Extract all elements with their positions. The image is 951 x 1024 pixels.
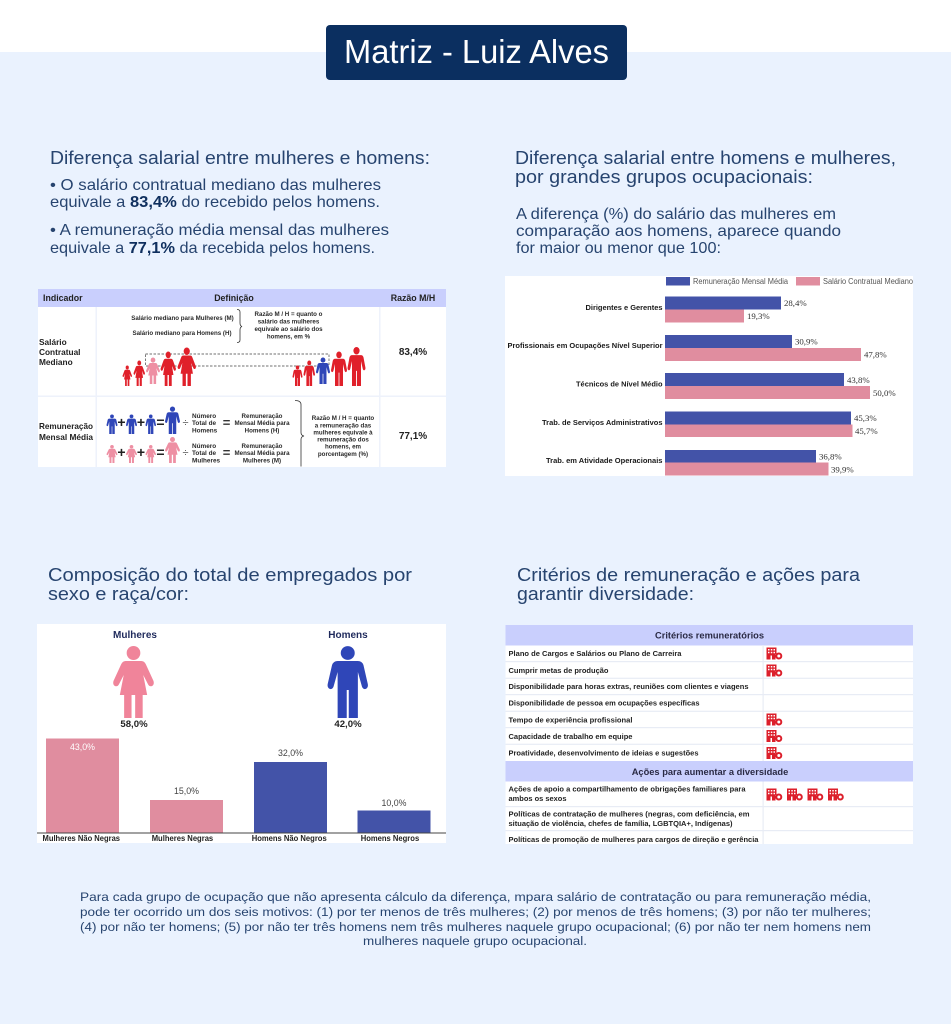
criteria rows: Cumprir metas de produção	[508, 666, 609, 675]
row label: salário contratual mediano: Salário	[39, 337, 67, 347]
heading and text: occupational groups: por grandes grupos ocupacionais:	[515, 166, 813, 187]
group: Técnicos: Técnicos de Nível Médio	[576, 380, 663, 388]
criteria rows	[508, 649, 748, 758]
average pay definition: mulheres equivale à	[313, 430, 373, 436]
footnote: pode ter ocorrido um dos seis motivos: (1) por ter menos de três mulheres; (2) por menos de três homens; (3) por não ter mulheres;	[80, 905, 871, 919]
bar: Mulheres Negras	[150, 786, 223, 843]
heading and text: occupational groups: A diferença (%) do salário das mulheres em	[516, 206, 836, 223]
bar: Mulheres Não Negras	[42, 738, 121, 843]
header: diversity actions	[506, 761, 913, 782]
heading: criteria	[517, 564, 861, 604]
panel: occupational bar chart	[505, 276, 914, 476]
bar: Homens Negros: 10,0%	[382, 798, 407, 808]
group: Técnicos: 43,8%	[847, 375, 870, 385]
group: Profissionais	[508, 335, 887, 361]
criteria rows: Tempo de experiência profissional	[508, 716, 632, 724]
group: Dirigentes e Gerentes: 19,3%	[747, 311, 770, 321]
average pay definition: Razão M / H = quanto	[312, 415, 374, 422]
women average formula: =	[156, 444, 165, 460]
men average formula: Homens	[192, 428, 218, 434]
women average formula: +	[117, 444, 126, 460]
women summary: Mulheres	[113, 630, 157, 641]
men summary: Homens	[328, 630, 368, 641]
bar: Mulheres Negras: 15,0%	[174, 786, 199, 796]
men average formula: Homens (H)	[245, 428, 279, 434]
average pay definition	[295, 400, 374, 466]
men average formula: Número	[192, 413, 216, 420]
group: Atividade Operacionais: Trab. em Atividade Operacionais	[546, 456, 662, 465]
heading: composition: sexo e raça/cor:	[48, 583, 189, 604]
group: Serviços Administrativos: Trab. de Serviços Administrativos	[542, 418, 662, 427]
heading: composition	[48, 564, 412, 604]
footnote: (4) por não ter homens; (5) por não ter três homens nem três mulheres naquele grupo ocupacional; (6) por não ter nem homens nem	[80, 920, 871, 934]
group: Atividade Operacionais	[546, 450, 854, 476]
chart legend	[666, 277, 914, 286]
women average formula: ÷	[182, 447, 189, 459]
diversity rows: Políticas de promoção de mulheres para cargos de direção e gerência	[508, 835, 759, 844]
group: Profissionais: 30,9%	[795, 336, 818, 346]
men average formula	[107, 407, 290, 434]
diversity rows: Ações de apoio a compartilhamento de obrigações familiares para	[508, 784, 746, 794]
women average formula: Mulheres (M)	[243, 458, 281, 464]
bar: Homens Negros	[358, 798, 430, 843]
bar: Homens Não Negros	[252, 748, 327, 843]
group: Dirigentes e Gerentes: 28,4%	[784, 298, 807, 308]
criteria rows: Plano de Cargos e Salários ou Plano de Carreira	[508, 649, 682, 658]
heading: criteria: garantir diversidade:	[517, 583, 694, 604]
women average formula: +	[137, 444, 145, 460]
row label: salário contratual mediano: Contratual	[39, 347, 80, 357]
group: Técnicos: 50,0%	[873, 388, 896, 398]
men average formula: ÷	[182, 417, 189, 429]
women average formula: Mulheres	[192, 458, 221, 464]
women average formula: Mensal Média para	[234, 450, 290, 457]
heading and text: occupational groups: comparação aos homens, aparece quando	[516, 223, 841, 240]
row label: remuneração mensal média	[39, 421, 93, 442]
median salary definition: homens, em %	[267, 334, 311, 340]
footnote: Para cada grupo de ocupação que não apresenta cálculo da diferença, mpara salário de contratação ou para remuneração média,	[80, 890, 871, 904]
heading and text: salary difference	[50, 147, 430, 257]
panel: indicator table	[38, 289, 446, 467]
header: criteria	[506, 625, 913, 646]
bar: Mulheres Negras: Mulheres Negras	[152, 834, 214, 843]
value 83,4%: 83,4%	[399, 347, 427, 358]
median salary definition: equivale ao salário dos	[254, 326, 323, 333]
row label: salário contratual mediano: Mediano	[39, 357, 73, 367]
bar: Homens Negros: Homens Negros	[361, 834, 420, 843]
header: criteria: Critérios remuneratórios	[655, 630, 764, 640]
icons: companies adopting actions	[766, 788, 844, 800]
men average formula: =	[156, 414, 165, 430]
women average formula: =	[223, 445, 231, 460]
heading: criteria: Critérios de remuneração e ações para	[517, 564, 861, 585]
heading and text: salary difference: Diferença salarial entre mulheres e homens:	[50, 147, 430, 168]
criteria rows: Proatividade, desenvolvimento de ideias e sugestões	[508, 748, 698, 758]
row label: remuneração mensal média: Mensal Média	[39, 432, 93, 442]
heading and text: salary difference: equivale a 83,4% do recebido pelos homens.	[50, 194, 380, 211]
criteria rows: Disponibilidade para horas extras, reuniões com clientes e viagens	[508, 682, 748, 691]
bar: Mulheres Não Negras: 43,0%	[70, 742, 95, 752]
median salary definition: Salário mediano para Homens (H)	[132, 330, 232, 337]
title badge	[326, 25, 627, 80]
table header: Indicador	[43, 293, 83, 303]
average pay definition: porcentagem (%)	[318, 451, 368, 458]
chart legend: Salário Contratual Mediano	[823, 277, 914, 286]
group: Serviços Administrativos: 45,3%	[854, 413, 877, 423]
men average formula: Total de	[192, 420, 216, 427]
bar: Mulheres Não Negras: Mulheres Não Negras	[42, 834, 121, 843]
chart legend: Remuneração Mensal Média	[693, 277, 789, 286]
men summary	[328, 630, 368, 730]
group: Técnicos	[576, 373, 896, 399]
group: Dirigentes e Gerentes	[586, 296, 807, 322]
men average formula: Remuneração	[242, 413, 283, 420]
footnote	[80, 890, 871, 948]
table header: Definição	[214, 293, 254, 303]
criteria rows: Capacidade de trabalho em equipe	[508, 732, 632, 741]
group: Dirigentes e Gerentes: Dirigentes e Gerentes	[586, 303, 662, 312]
median dashed box	[146, 354, 329, 366]
bar: Homens Não Negros: 32,0%	[278, 748, 303, 758]
group: Profissionais: Profissionais em Ocupações Nível Superior	[508, 341, 663, 350]
women average formula: Total de	[192, 450, 216, 457]
median salary definition	[131, 310, 323, 342]
group: Serviços Administrativos	[542, 412, 878, 437]
men summary: 42,0%	[334, 719, 362, 730]
icons: men ordered by salary	[293, 347, 365, 386]
panel: criteria table	[506, 625, 913, 844]
diversity rows: ambos os sexos	[508, 794, 566, 803]
panel: composition by sex and race	[37, 624, 446, 843]
men average formula: +	[117, 414, 126, 430]
heading and text: salary difference: equivale a 77,1% da recebida pelos homens.	[50, 240, 375, 257]
men average formula: =	[223, 415, 231, 430]
women average formula: Número	[192, 443, 216, 450]
diversity rows: Políticas de contratação de mulheres (negras, com deficiência, em	[508, 810, 750, 818]
group: Serviços Administrativos: 45,7%	[855, 426, 878, 436]
men average formula: +	[137, 414, 145, 430]
row label: remuneração mensal média: Remuneração	[39, 421, 93, 431]
diversity rows	[508, 784, 759, 844]
women summary: 58,0%	[120, 719, 148, 730]
heading and text: salary difference: • A remuneração média mensal das mulheres	[50, 222, 389, 239]
men average formula: Mensal Média para	[234, 420, 290, 427]
heading: composition: Composição do total de empregados por	[48, 564, 412, 585]
average pay definition: remuneração dos	[317, 436, 369, 444]
heading and text: occupational groups: for maior ou menor que 100:	[516, 240, 721, 257]
row label: salário contratual mediano	[39, 337, 80, 367]
footnote: mulheres naquele grupo ocupacional.	[363, 934, 587, 948]
women average formula: Remuneração	[242, 443, 283, 450]
heading and text: occupational groups: Diferença salarial entre homens e mulheres,	[515, 147, 896, 168]
median salary definition: salário das mulheres	[258, 318, 320, 326]
heading and text: occupational groups	[515, 147, 896, 257]
group: Profissionais: 47,8%	[864, 350, 887, 360]
women summary	[113, 630, 157, 730]
title badge: Matriz - Luiz Alves	[344, 33, 609, 70]
median salary definition: Razão M / H = quanto o	[255, 311, 323, 318]
criteria rows: Disponibilidade de pessoa em ocupações específicas	[508, 698, 700, 708]
women average formula	[107, 437, 290, 464]
header: diversity actions: Ações para aumentar a diversidade	[632, 767, 788, 777]
bar: Homens Não Negros: Homens Não Negros	[252, 834, 327, 843]
heading and text: salary difference: • O salário contratual mediano das mulheres	[50, 177, 381, 194]
group: Atividade Operacionais: 36,8%	[819, 452, 842, 462]
icons: women ordered by salary	[123, 348, 196, 386]
table header	[43, 293, 435, 303]
icons: companies adopting criteria	[766, 648, 782, 759]
diversity rows: situação de violência, chefes de família, LGBTQIA+, Indígenas)	[508, 819, 733, 828]
group: Atividade Operacionais: 39,9%	[831, 464, 854, 474]
average pay definition: homens, em	[325, 444, 362, 450]
median salary definition: Salário mediano para Mulheres (M)	[131, 315, 234, 322]
average pay definition: a remuneração das	[315, 422, 372, 430]
value 77,1%: 77,1%	[399, 431, 427, 442]
table header: Razão M/H	[391, 293, 435, 303]
